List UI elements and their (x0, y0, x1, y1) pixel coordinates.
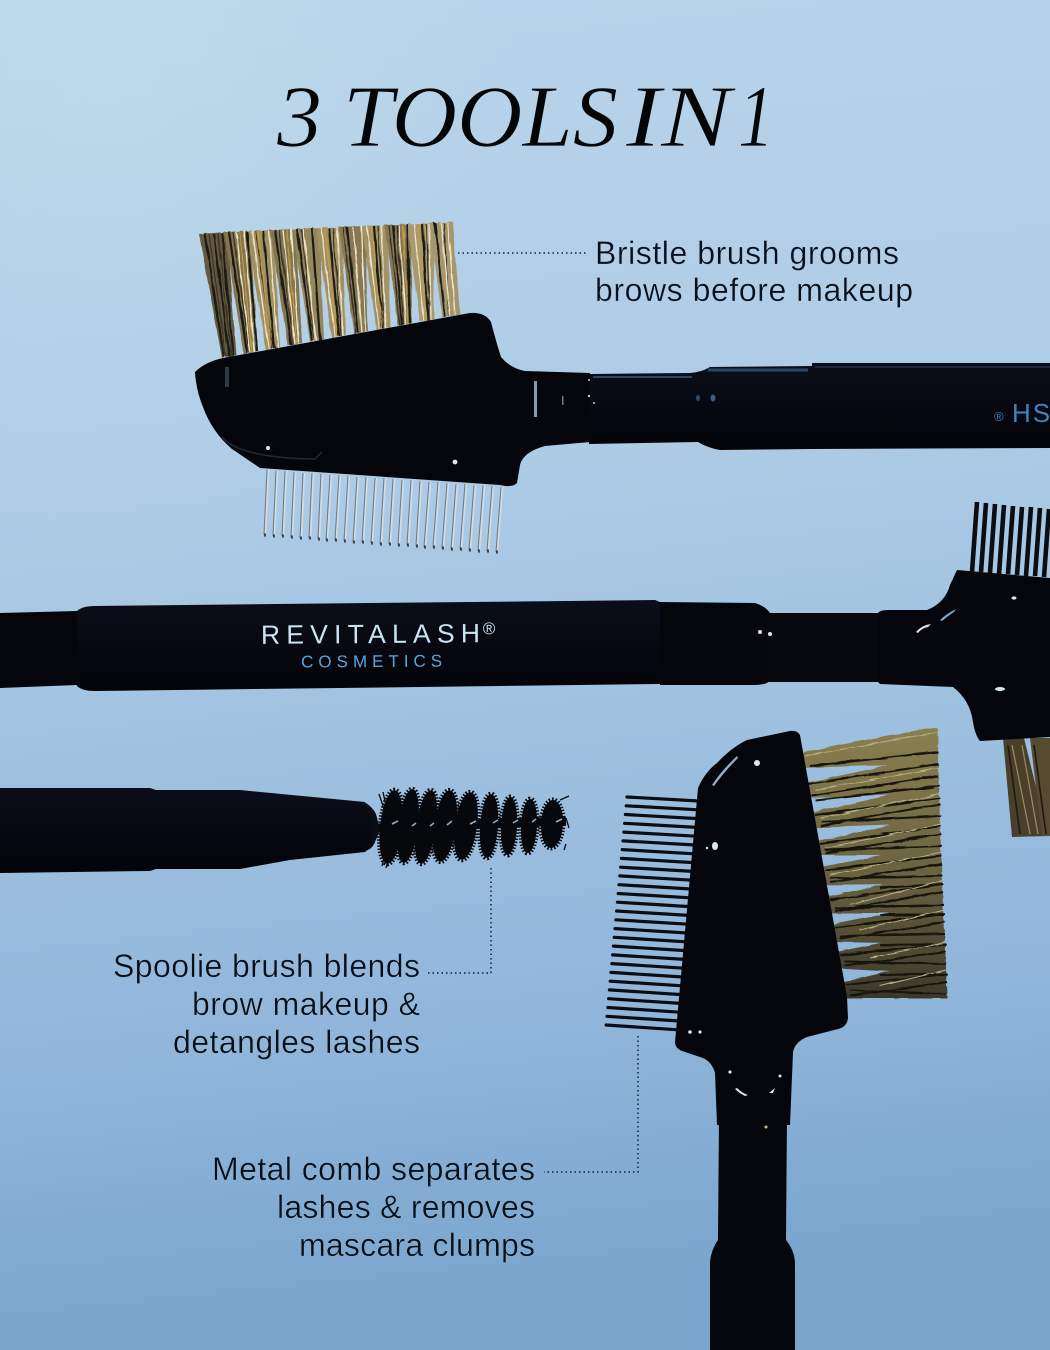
comb head (195, 313, 590, 486)
callout: bristle brush: brows before makeup (595, 272, 913, 308)
handle (589, 363, 1050, 450)
handle joint dots (588, 379, 716, 404)
callout: metal comb: lashes & removes (277, 1189, 535, 1225)
bristle tufts (800, 728, 947, 998)
spoolie stem highlights (392, 819, 562, 826)
bristles under head (1003, 738, 1050, 837)
metal comb teeth (264, 470, 502, 553)
logo: COSMETICS (301, 652, 442, 672)
lower right brush: vertical comb and bristles (606, 728, 947, 1350)
title: 1 (738, 69, 774, 166)
comb teeth (606, 797, 699, 1030)
callout: metal comb: Metal comb separates (212, 1151, 535, 1187)
logo (261, 618, 496, 672)
top brush: bristle and comb tool (195, 222, 1050, 553)
bristle tufts (199, 222, 460, 358)
stem highlight (764, 1126, 768, 1128)
logo: REVITALASH (261, 618, 480, 650)
handle segments (0, 611, 77, 688)
head highlights (222, 367, 564, 464)
middle brush with logo (0, 502, 1050, 837)
callout: metal comb: mascara clumps (299, 1227, 535, 1263)
head highlights (758, 596, 1016, 691)
title: IN (625, 69, 736, 166)
head (878, 570, 1050, 741)
callout: spoolie (113, 868, 491, 1060)
comb teeth at right edge (972, 502, 1049, 577)
callout: spoolie: brow makeup & (192, 986, 420, 1022)
handle logo fragment (994, 398, 1050, 428)
handle (0, 788, 372, 873)
stem (710, 1115, 795, 1350)
callout: spoolie: Spoolie brush blends (113, 948, 420, 984)
callout: spoolie: detangles lashes (173, 1024, 420, 1060)
callout: bristle brush: Bristle brush grooms (595, 235, 899, 271)
spoolie brush (0, 788, 569, 873)
head highlights (688, 756, 782, 1096)
title: TOOLS (343, 69, 618, 166)
handle logo fragment: ® (994, 409, 1004, 424)
head (675, 731, 848, 1125)
logo: ® (483, 619, 496, 638)
spoolie bristles (375, 788, 569, 868)
ferrule (364, 803, 380, 851)
callout: metal comb (212, 1036, 638, 1263)
callout: bristle brush (458, 235, 913, 308)
handle rim highlights (593, 367, 1050, 377)
title: 3 (276, 69, 322, 166)
bristle streaks (808, 752, 947, 996)
